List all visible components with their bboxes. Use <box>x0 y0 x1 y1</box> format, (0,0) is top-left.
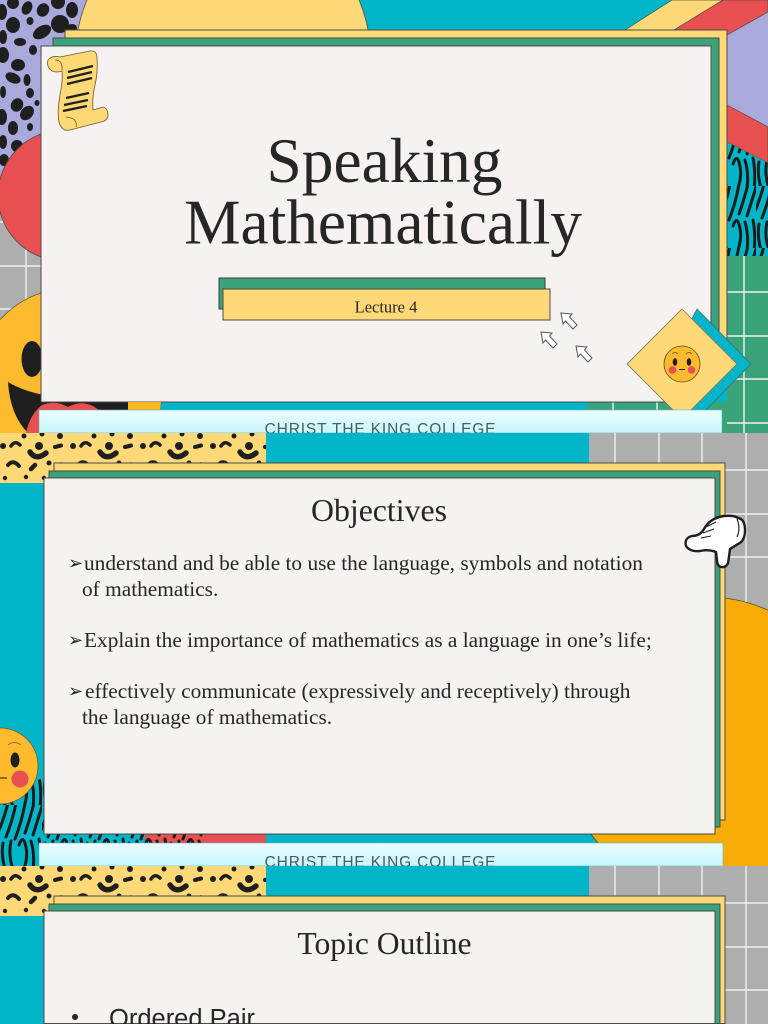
background: collage of shapes <box>0 433 768 891</box>
footer bar: CHRIST THE KING COLLEGE <box>265 421 496 438</box>
slide 2: objectives <box>0 433 768 891</box>
subtitle bar: Lecture 4: Lecture 4 <box>355 298 417 316</box>
panel: stacked objectives card <box>44 463 725 834</box>
emoji: laughing face <box>0 288 164 476</box>
slide 1: title slide <box>0 0 768 476</box>
background: collage of shapes <box>0 866 768 1024</box>
icon: three cursor arrows <box>541 313 592 362</box>
emoji: blushing face <box>0 728 38 804</box>
icon: paper scroll <box>48 51 108 130</box>
text block: objectives list: ➢ <box>68 630 83 651</box>
text block: objectives list: Explain the importance of mathematics as a language in one’s life; <box>84 628 652 652</box>
title <box>184 126 582 258</box>
text block: objectives list <box>68 551 652 729</box>
text block: objectives list: effectively communicate (expressively and receptively) through <box>85 679 631 703</box>
panel: stacked title card <box>41 30 727 402</box>
text block: objectives list: ➢ <box>68 681 83 702</box>
background: collage of shapes <box>0 0 768 433</box>
text block: objectives list: understand and be able to use the language, symbols and notation <box>84 551 643 575</box>
slide 3: topic outline <box>0 866 768 1024</box>
strip segment below the card <box>128 402 161 410</box>
text block: objectives list: of mathematics. <box>82 577 218 601</box>
footer bar <box>39 410 722 438</box>
heading: Topic Outline: Topic Outline <box>297 926 472 961</box>
text block: objectives list: ➢ <box>68 553 83 574</box>
title: Speaking <box>267 126 502 196</box>
panel: stacked outline card <box>44 896 725 1024</box>
icon: diamond badge with blushing emoji <box>627 309 751 419</box>
heading: Objectives: Objectives <box>311 493 447 528</box>
footer bar <box>39 843 723 871</box>
subtitle bar: Lecture 4 <box>219 278 550 320</box>
footer bar: CHRIST THE KING COLLEGE <box>265 854 496 871</box>
title: Mathematically <box>184 188 582 258</box>
icon: pointing glove hand <box>686 516 745 567</box>
text block: objectives list: the language of mathematics. <box>82 705 332 729</box>
